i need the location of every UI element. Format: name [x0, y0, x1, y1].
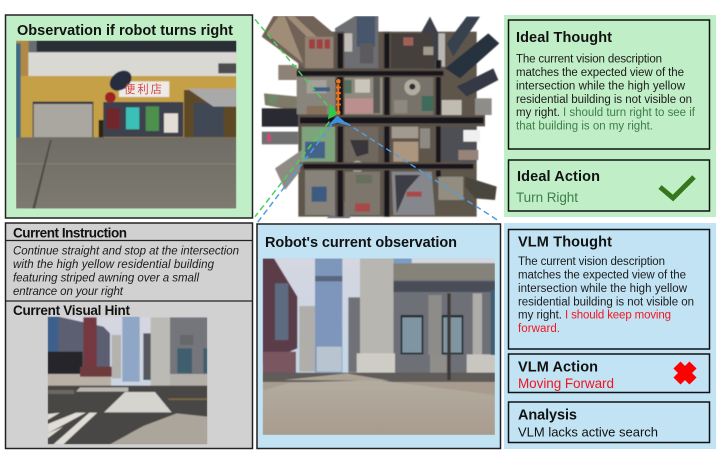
icon: red cross — [677, 365, 693, 381]
city blocks — [297, 76, 337, 114]
heading: analysis: Analysis — [518, 408, 577, 424]
text: ideal thought body: that building is on my right. — [516, 120, 653, 132]
heading: robot's current observation: Robot's current observation — [265, 235, 457, 251]
map: top-down city view with robot path — [255, 16, 500, 223]
box: ideal thought — [508, 20, 710, 149]
heading: current instruction: Current Instruction — [13, 226, 127, 240]
text: VLM thought body: I should keep moving — [565, 310, 671, 322]
text: VLM thought body: residential building is not visible on — [518, 296, 694, 308]
dashed view lines: ideal direction — [255, 19, 331, 217]
box: VLM thought — [508, 230, 710, 349]
text: instruction: featuring striped awning over a small — [13, 272, 199, 284]
heading: VLM action: VLM Action — [518, 360, 598, 376]
box: analysis — [508, 402, 710, 442]
box: ideal action — [508, 160, 710, 211]
text: ideal thought body: residential building is not visible on — [516, 94, 692, 106]
image: convenience store street view — [16, 41, 237, 209]
text: analysis body: VLM lacks active search — [518, 424, 658, 440]
text: ideal thought body: my right. — [516, 107, 560, 119]
icon: check mark — [660, 177, 694, 198]
text: moving forward: Moving Forward — [518, 376, 614, 391]
text: ideal thought body: I should turn right to see if — [563, 107, 696, 119]
text: ideal thought body — [516, 54, 696, 132]
text: instruction: Continue straight and stop at the intersection — [13, 246, 239, 258]
dashed view lines: VLM direction — [257, 117, 500, 223]
image: visual hint street view — [48, 317, 207, 444]
panel: VLM result background — [504, 223, 716, 449]
text: instruction: with the high yellow residential building — [13, 259, 215, 271]
image: current street view — [263, 258, 495, 435]
text: VLM thought body — [518, 256, 694, 335]
text: ideal thought body: The current vision description — [516, 54, 662, 66]
heading: ideal thought: Ideal Thought — [516, 30, 612, 46]
robot path — [336, 79, 341, 115]
surrounding towers — [262, 16, 334, 68]
panel: current instruction and visual hint — [5, 223, 252, 448]
text: VLM thought body: forward. — [518, 323, 560, 335]
panel: observation if robot turns right — [6, 15, 252, 218]
icon: green robot direction arrow — [328, 103, 338, 119]
text: VLM thought body: The current vision description — [518, 256, 665, 268]
text: VLM thought body: intersection while the high yellow — [518, 283, 688, 295]
icon: blue robot direction arrow — [327, 116, 350, 126]
city base — [298, 32, 477, 217]
sign text: 便利店 — [124, 82, 164, 96]
panel: ideal result background — [504, 15, 716, 217]
text: VLM thought body: my right. — [518, 310, 562, 322]
heading: observation if robot turns right: Observation if robot turns right — [17, 23, 233, 39]
heading: VLM thought: VLM Thought — [518, 234, 612, 250]
text: ideal thought body: intersection while the high yellow — [516, 80, 686, 92]
roads — [335, 32, 344, 217]
text: ideal thought body: matches the expected view of the — [516, 67, 684, 79]
text: instruction — [13, 246, 239, 298]
heading: current visual hint: Current Visual Hint — [13, 303, 130, 318]
panel: robot's current observation — [257, 224, 500, 448]
text: VLM thought body: matches the expected view of the — [518, 270, 686, 282]
text: instruction: entrance on your right — [13, 286, 124, 298]
text: turn right: Turn Right — [516, 190, 578, 205]
box: VLM action — [508, 354, 710, 392]
heading: ideal action: Ideal Action — [517, 169, 600, 185]
